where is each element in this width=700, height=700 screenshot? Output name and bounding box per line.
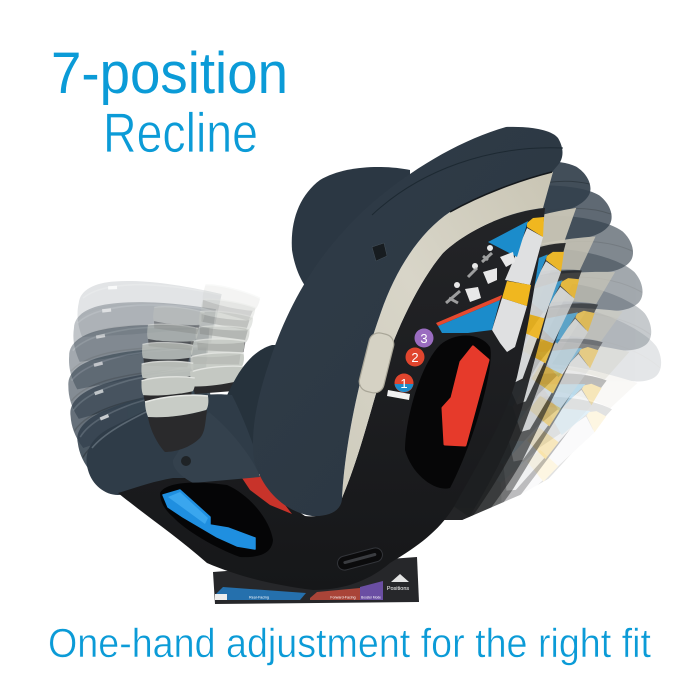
ghost recline positions: seat front fan (68, 281, 222, 468)
shell (118, 208, 545, 590)
step badge 2 (406, 348, 424, 366)
seat bottom cushion (87, 394, 262, 495)
seat back cushion (253, 127, 563, 516)
beige slot button (357, 331, 396, 395)
step badge 3: 3 (420, 331, 428, 346)
headrest (292, 167, 410, 292)
red adjustment handle (405, 335, 491, 489)
caption: One-hand adjustment for the right fit (48, 620, 652, 666)
infographic canvas (50, 50, 661, 666)
base with position labels: Booster Mode (361, 596, 381, 600)
car seat main body (87, 127, 563, 604)
middle cushion (225, 345, 300, 475)
blue adjustment handle (160, 483, 273, 557)
ghost recline positions: seat back fan (444, 162, 661, 520)
title: 7-position: 7-position (51, 41, 288, 106)
beige side panel (342, 172, 553, 498)
red frame detail (242, 475, 292, 514)
step badge 1: 1 (400, 376, 408, 391)
step badge 1 (387, 374, 414, 400)
base with position labels (213, 557, 419, 604)
base with position labels: Rear-Facing (249, 596, 269, 600)
title: Recline: Recline (103, 101, 258, 164)
base with position labels: Forward-Facing (330, 596, 356, 600)
cup holder (145, 395, 208, 452)
warning label panel (436, 217, 544, 352)
base with position labels: Positions (387, 586, 409, 592)
seat flap with knob (173, 412, 260, 483)
step badge 3 (414, 328, 434, 348)
brand tag (372, 243, 387, 261)
base button (336, 546, 384, 572)
step badge 2: 2 (411, 350, 419, 365)
ghost cup holders (141, 280, 261, 404)
